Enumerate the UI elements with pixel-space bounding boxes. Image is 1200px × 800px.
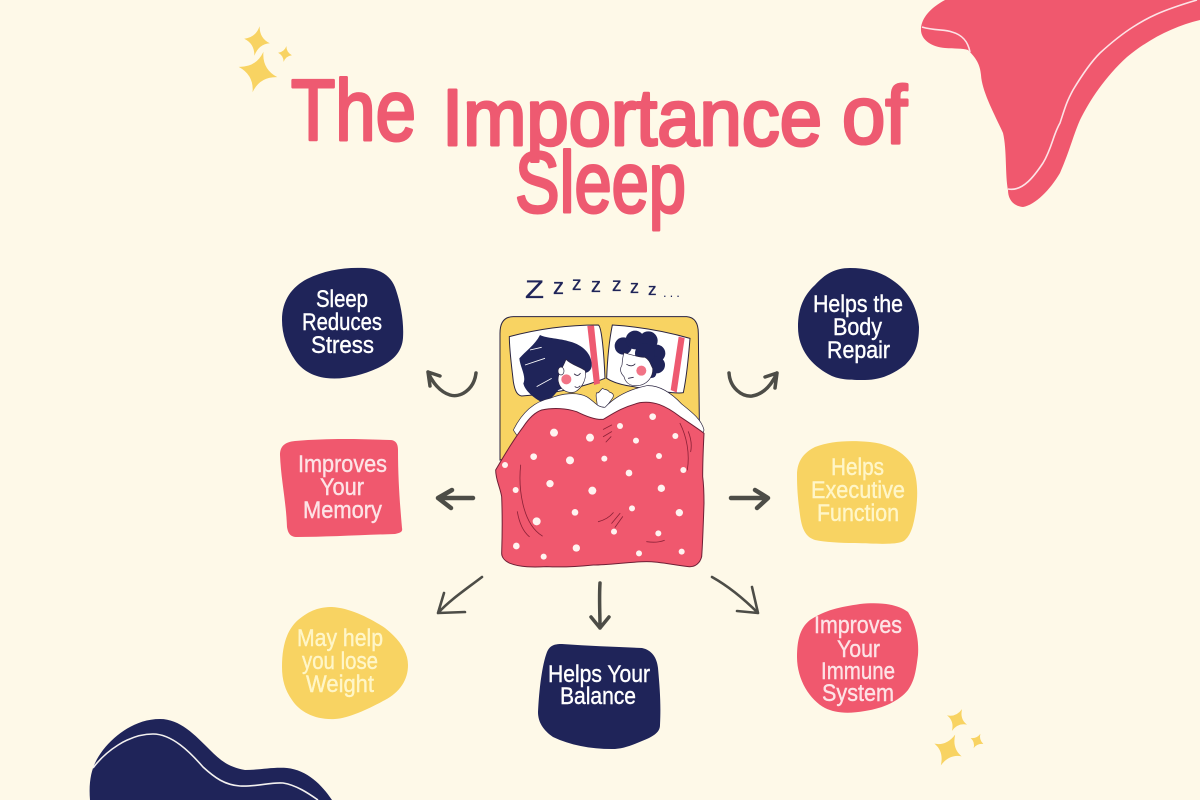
bubble: Helps Your Balance: Balance	[560, 683, 636, 710]
bubble: Helps Your Balance: Helps Your	[548, 661, 650, 688]
title: Sleep	[515, 135, 686, 231]
woman	[519, 335, 592, 402]
snoring text: z	[648, 280, 656, 299]
snoring text	[525, 274, 683, 304]
bubble: Sleep Reduces Stress: Stress	[311, 332, 374, 359]
bubble: Helps the Body Repair: Body	[833, 314, 882, 341]
bubble: Helps Executive Function	[797, 441, 917, 544]
bubble: Sleep Reduces Stress: Reduces	[302, 309, 382, 336]
bubble: Helps Executive Function: Helps	[831, 454, 884, 481]
decorative blob: top right	[921, 0, 1200, 207]
title: of	[842, 70, 907, 161]
arrow: down-left to May help you lose Weight	[438, 577, 482, 613]
bubble: Sleep Reduces Stress: Sleep	[316, 286, 368, 313]
snoring text: z	[612, 275, 622, 296]
arrow: left to Improves Your Memory	[438, 490, 473, 508]
bubble: Helps Executive Function: Executive	[811, 477, 905, 504]
snoring text: z	[630, 277, 639, 297]
bubble: Improves Your Immune System	[797, 603, 918, 713]
snoring text: z	[572, 274, 582, 295]
arrow: curved to Helps the Body Repair	[729, 373, 777, 396]
blanket dots	[502, 413, 686, 560]
bubble: Helps the Body Repair: Helps the	[813, 291, 903, 318]
bubble: Improves Your Immune System: Immune	[821, 658, 895, 685]
bubble: Improves Your Memory: Memory	[303, 497, 382, 524]
snoring text: z	[591, 275, 601, 297]
snoring text: Z	[525, 276, 544, 304]
arrow: down-right to Improves Your Immune System	[712, 577, 758, 613]
bubble: Improves Your Immune System: System	[822, 680, 894, 707]
bubble: May help you lose Weight: May help	[297, 625, 383, 652]
bubble: May help you lose Weight: you lose	[302, 648, 378, 675]
arrow: down to Helps Your Balance	[591, 583, 609, 628]
bubble: May help you lose Weight	[282, 607, 408, 719]
snoring text: z	[553, 274, 564, 299]
title: Importance	[442, 73, 822, 162]
snoring text: ...	[663, 285, 683, 300]
sparkles: top left	[233, 24, 293, 97]
blanket creases	[517, 423, 691, 542]
sparkles: bottom right	[927, 704, 987, 772]
illustration: couple sleeping in bed	[496, 317, 704, 567]
bubble: Improves Your Memory: Improves	[298, 451, 387, 478]
bubble: Helps the Body Repair	[798, 268, 919, 380]
bubble: Helps Your Balance	[538, 644, 660, 749]
bed frame	[500, 317, 699, 460]
bubble: Helps Executive Function: Function	[817, 500, 899, 527]
bubble: May help you lose Weight: Weight	[306, 671, 374, 698]
bubble: Helps the Body Repair: Repair	[827, 337, 890, 364]
bubble: Improves Your Immune System: Improves	[814, 612, 902, 639]
title: The	[291, 63, 416, 159]
decorative blob: bottom left	[90, 719, 332, 800]
arrow: right to Helps Executive Function	[731, 490, 768, 508]
bubble: Improves Your Immune System: Your	[837, 636, 880, 663]
left pillow	[509, 325, 605, 396]
bubble: Sleep Reduces Stress	[282, 268, 403, 379]
title	[291, 63, 907, 231]
right pillow	[607, 325, 690, 393]
arrow: curved to Sleep Reduces Stress	[428, 372, 476, 396]
hand	[596, 388, 613, 409]
bubble: Improves Your Memory: Your	[320, 474, 364, 501]
blanket	[496, 402, 704, 567]
bubble: Improves Your Memory	[280, 439, 402, 537]
blanket fold	[513, 386, 704, 443]
man	[615, 331, 665, 386]
